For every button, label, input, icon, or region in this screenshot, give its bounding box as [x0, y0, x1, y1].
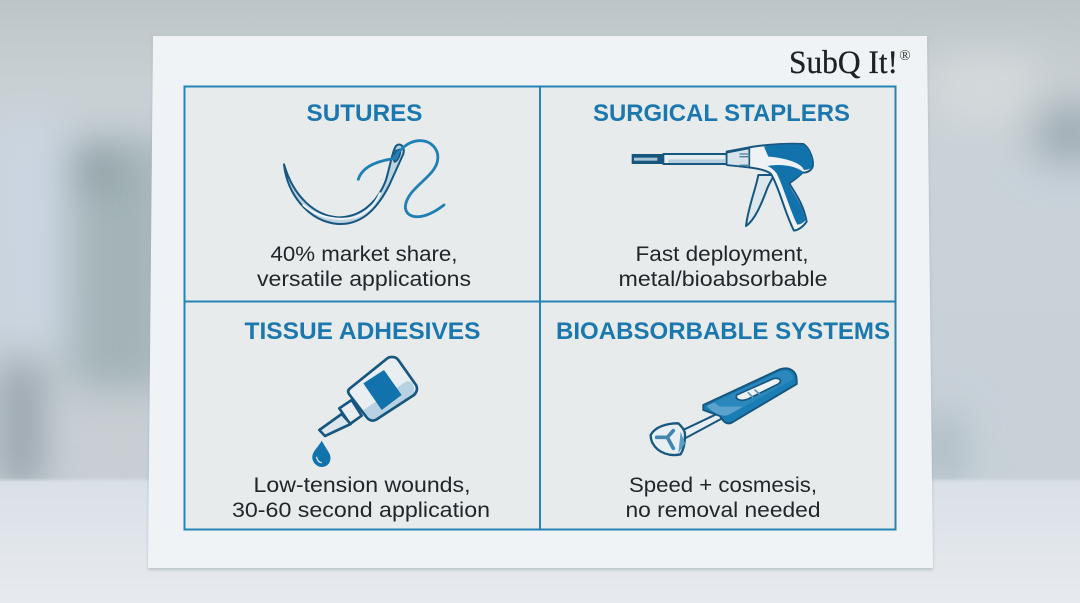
card [148, 36, 933, 568]
heading: bioabsorbable systems: BIOABSORBABLE SYSTEMS [556, 318, 890, 345]
caption: surgical staplers: metal/bioabsorbable [618, 267, 828, 291]
heading: surgical staplers: SURGICAL STAPLERS [593, 100, 850, 127]
caption: tissue adhesives [232, 473, 490, 522]
card shadow [148, 37, 933, 570]
caption: bioabsorbable systems [626, 473, 820, 522]
heading: tissue adhesives: TISSUE ADHESIVES [244, 318, 480, 345]
logo: ® [899, 48, 911, 64]
caption: sutures: 40% market share, [270, 242, 458, 266]
caption: surgical staplers [618, 242, 828, 291]
grid panel [184, 86, 896, 530]
caption: tissue adhesives: Low-tension wounds, [254, 473, 470, 497]
panel: tissue adhesives [232, 318, 490, 522]
caption: bioabsorbable systems: Speed + cosmesis, [629, 473, 817, 497]
caption: surgical staplers: Fast deployment, [636, 242, 808, 266]
caption: sutures: versatile applications [257, 267, 471, 291]
heading: sutures: SUTURES [306, 100, 422, 127]
caption: bioabsorbable systems: no removal needed [626, 498, 820, 522]
icon: stapler [632, 144, 813, 231]
panel: sutures [257, 100, 471, 291]
caption: sutures [257, 242, 471, 291]
panel: bioabsorbable systems [556, 318, 890, 522]
caption: tissue adhesives: 30-60 second application [232, 498, 490, 522]
icon: adhesive bottle [312, 357, 417, 467]
panel: surgical staplers [593, 100, 850, 291]
icon: needle and thread [284, 141, 444, 224]
logo: SubQ It! [789, 45, 898, 81]
icon: bioabsorbable device [651, 368, 797, 455]
